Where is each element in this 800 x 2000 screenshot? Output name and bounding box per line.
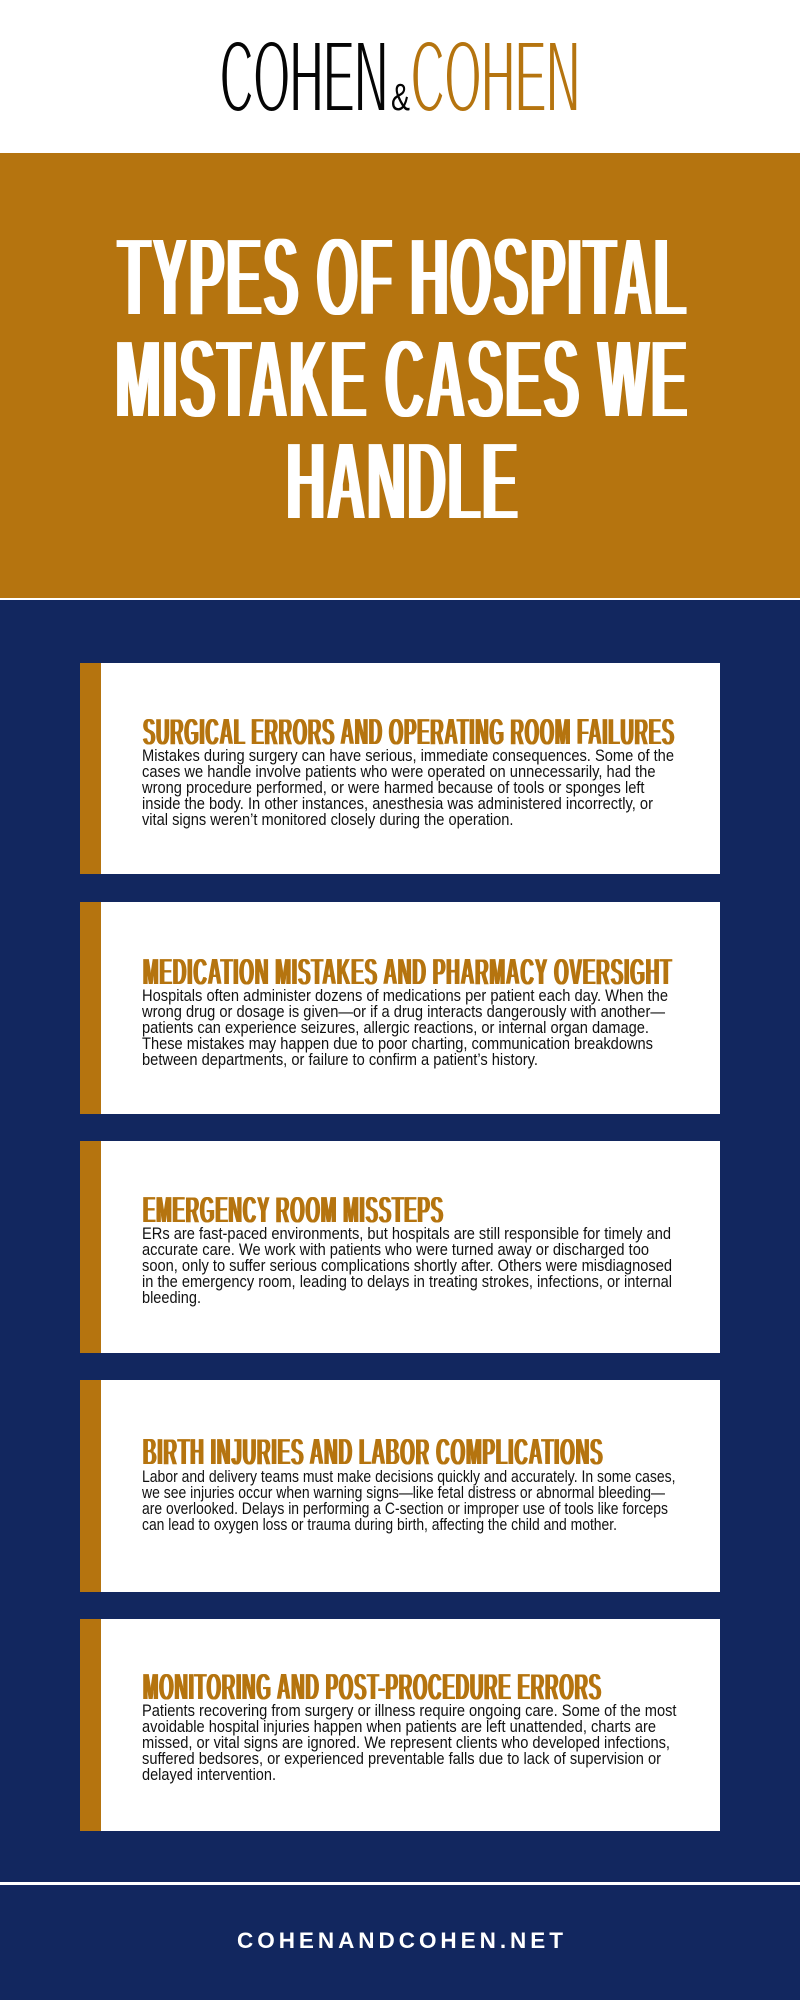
text: medication mistakes	[141, 987, 668, 1069]
title banner	[0, 153, 800, 598]
panel: surgical errors	[80, 663, 720, 874]
text: emergency room: ERs are fast-paced environments, but hospitals are still responsible for timely and	[142, 1225, 671, 1243]
text: surgical errors	[141, 747, 674, 829]
text: birth injuries: we see injuries occur when warning signs—like fetal distress or abnormal bleeding—	[141, 1484, 666, 1502]
panel: monitoring errors	[80, 1619, 720, 1831]
text: surgical errors: inside the body. In other instances, anesthesia was administered incorrectly, or	[142, 795, 654, 813]
logo: &	[391, 77, 410, 119]
text: medication mistakes: Hospitals often administer dozens of medications per patient each day. When the	[142, 987, 668, 1005]
text: emergency room: in the emergency room, leading to delays in treating strokes, infections, or internal	[142, 1273, 672, 1291]
text: birth injuries: are overlooked. Delays in performing a C-section or improper use of tools like forceps	[142, 1500, 668, 1518]
text: monitoring errors: Patients recovering from surgery or illness require ongoing care. Some of the most	[142, 1702, 677, 1720]
panel: birth injuries	[80, 1380, 720, 1592]
text: monitoring errors: suffered bedsores, or experienced preventable falls due to lack of supervision or	[142, 1750, 662, 1768]
navy content background	[0, 600, 800, 2000]
footer website: COHENANDCOHEN.NET	[237, 1928, 563, 1953]
text: monitoring errors: delayed intervention.	[142, 1766, 276, 1784]
text: COHEN	[411, 19, 580, 134]
text: surgical errors: vital signs weren’t monitored closely during the operation.	[142, 811, 514, 829]
text: surgical errors: wrong procedure performed, or were harmed because of tools or sponges left	[141, 779, 645, 797]
text: surgical errors: Mistakes during surgery can have serious, immediate consequences. Some of the	[142, 747, 674, 765]
panel: emergency room	[80, 1141, 720, 1353]
text: emergency room: accurate care. We work with patients who were turned away or discharged too	[142, 1241, 649, 1259]
logo: COHEN	[220, 19, 388, 134]
text: birth injuries: Labor and delivery teams must make decisions quickly and accurately. In some cases,	[142, 1468, 676, 1486]
text: emergency room	[142, 1225, 672, 1307]
text: birth injuries: can lead to oxygen loss or trauma during birth, affecting the child and mother.	[142, 1516, 617, 1534]
text: monitoring errors: avoidable hospital injuries happen when patients are left unattended, charts are	[142, 1718, 656, 1736]
panel: medication mistakes	[80, 902, 720, 1114]
text: emergency room: soon, only to suffer serious complications shortly after. Others were misdiagnosed	[142, 1257, 672, 1275]
panel: emergency room: EMERGENCY ROOM MISSTEPS	[143, 1189, 444, 1232]
title	[116, 212, 689, 546]
text: medication mistakes: between departments, or failure to confirm a patient’s history.	[142, 1051, 538, 1069]
text: birth injuries	[141, 1468, 676, 1534]
text: monitoring errors: missed, or vital signs are ignored. We represent clients who developed infections,	[142, 1734, 670, 1752]
text: emergency room: bleeding.	[142, 1289, 201, 1307]
text: medication mistakes: patients can experience seizures, allergic reactions, or internal organ damage.	[142, 1019, 649, 1037]
text: monitoring errors	[142, 1702, 677, 1784]
title: HANDLE	[286, 416, 520, 546]
text: medication mistakes: These mistakes may happen due to poor charting, communication breakdowns	[142, 1035, 653, 1053]
text: surgical errors: cases we handle involve patients who were operated on unnecessarily, had the	[142, 763, 656, 781]
text: medication mistakes: wrong drug or dosage is given—or if a drug interacts dangerously with another—	[141, 1003, 666, 1021]
